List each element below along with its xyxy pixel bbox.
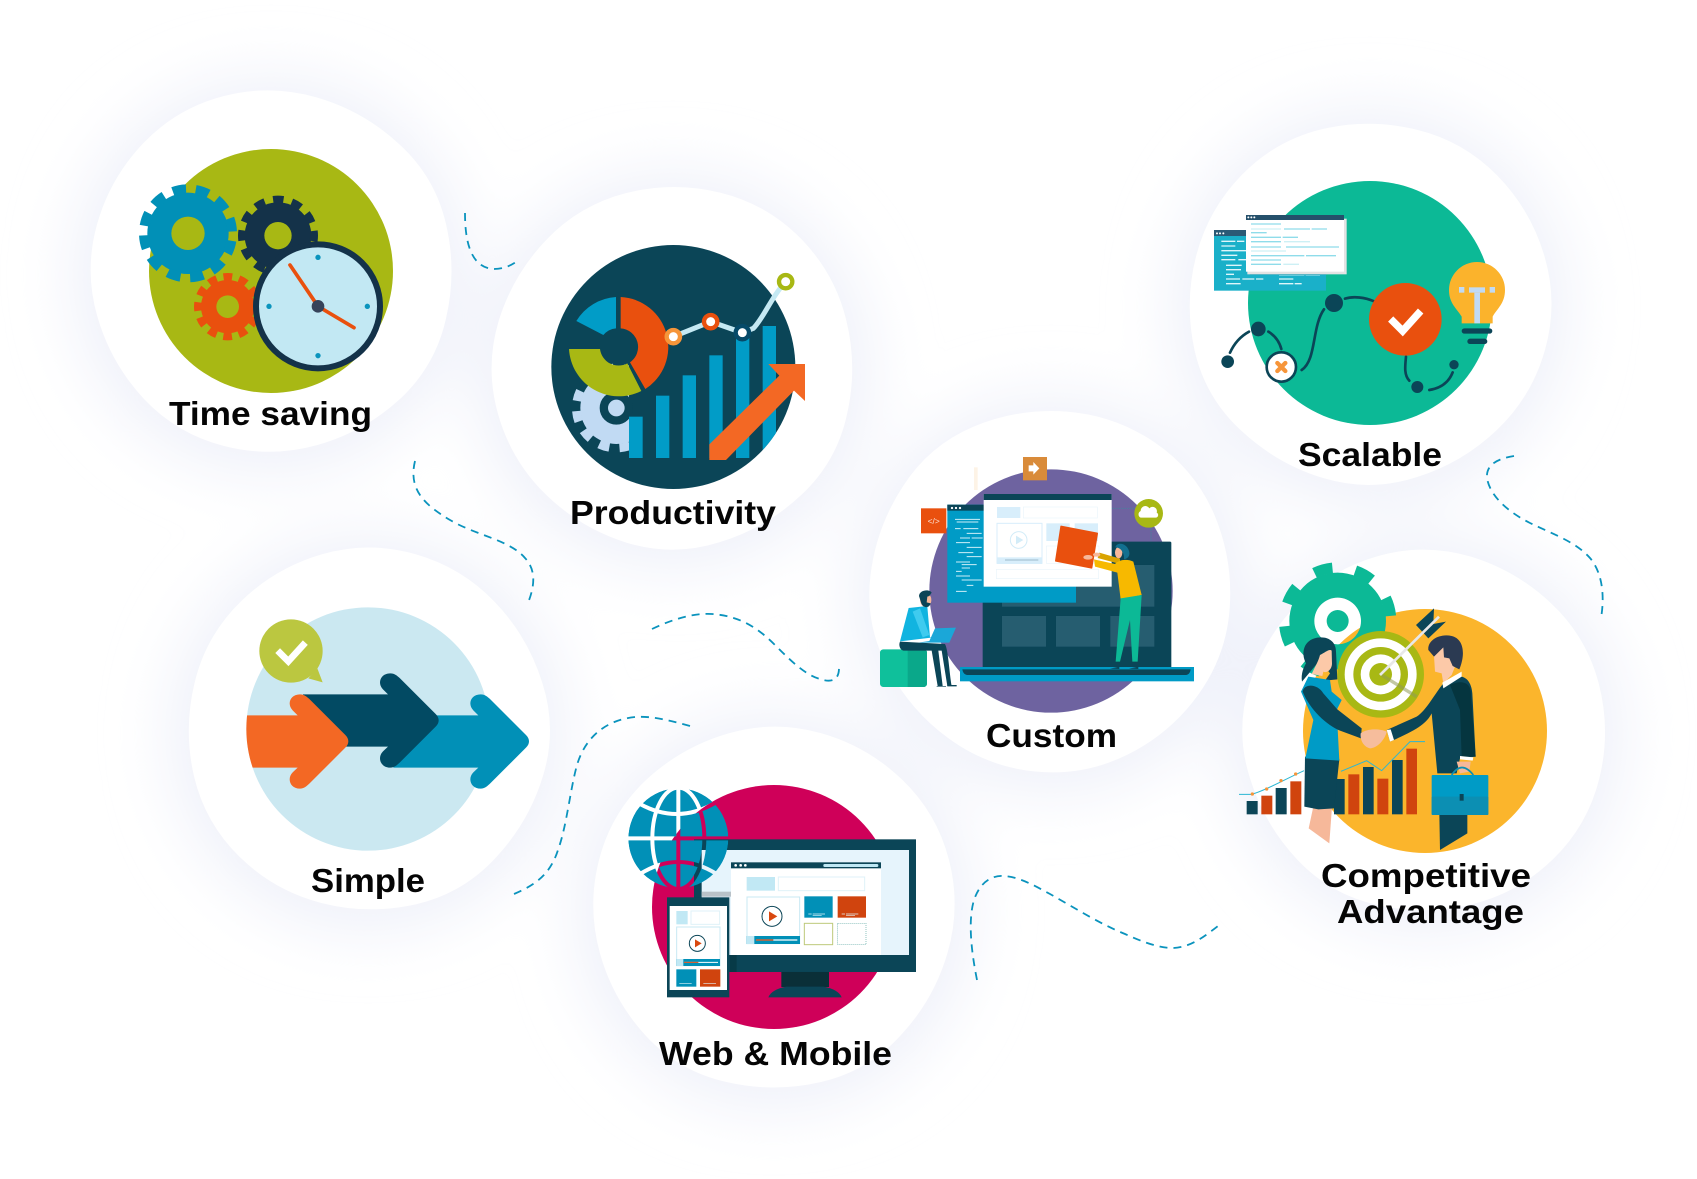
- panel: Competitive Advantage: [1178, 484, 1672, 978]
- white blob: [1123, 56, 1617, 550]
- figure: seated man with laptop: [880, 590, 957, 687]
- label: Custom: Custom: [986, 717, 1117, 754]
- label: Scalable: Scalable: [1298, 436, 1442, 473]
- panel: Time saving: [91, 90, 452, 452]
- icon: team building a custom web page: </>: [928, 516, 940, 526]
- white blob: [426, 120, 920, 614]
- panel: Scalable: [1123, 56, 1617, 550]
- label: Web & Mobile: Web & Mobile: [659, 1035, 892, 1072]
- panel: Productivity: [492, 187, 852, 550]
- label: Productivity: Productivity: [570, 494, 777, 531]
- icon: three arrows and check bubble: [246, 607, 529, 851]
- label: Competitive Advantage: [1321, 857, 1531, 930]
- label: Time saving: Time saving: [169, 395, 372, 432]
- label: Simple: Simple: [311, 862, 425, 899]
- icon: code windows, path and light bulb: [1214, 181, 1505, 425]
- white blob: [121, 482, 615, 976]
- white blob: [820, 359, 1282, 822]
- dashed connectors: [413, 213, 1603, 980]
- panel: Simple: [189, 548, 550, 909]
- icon: handshake, target, gear and chart: [1239, 553, 1547, 853]
- white blob: [91, 90, 452, 452]
- white blob: [593, 727, 955, 1088]
- figure: woman with orange panel: [1083, 544, 1142, 669]
- white blob: [1178, 484, 1672, 978]
- panel: Custom: [820, 359, 1282, 822]
- panel: Web & Mobile: [593, 727, 955, 1088]
- figure: woman: [1301, 637, 1387, 843]
- icon: globe, monitor and tablet: [628, 785, 916, 1029]
- icon: team building a custom web page: [880, 457, 1194, 713]
- icon: charts and growth arrow: [551, 245, 805, 489]
- figure: man: [1387, 635, 1488, 850]
- label: Competitive Advantage: Advantage: [1337, 893, 1524, 930]
- label: Competitive Advantage: Competitive: [1321, 857, 1531, 894]
- icon: gears and clock: [137, 149, 393, 393]
